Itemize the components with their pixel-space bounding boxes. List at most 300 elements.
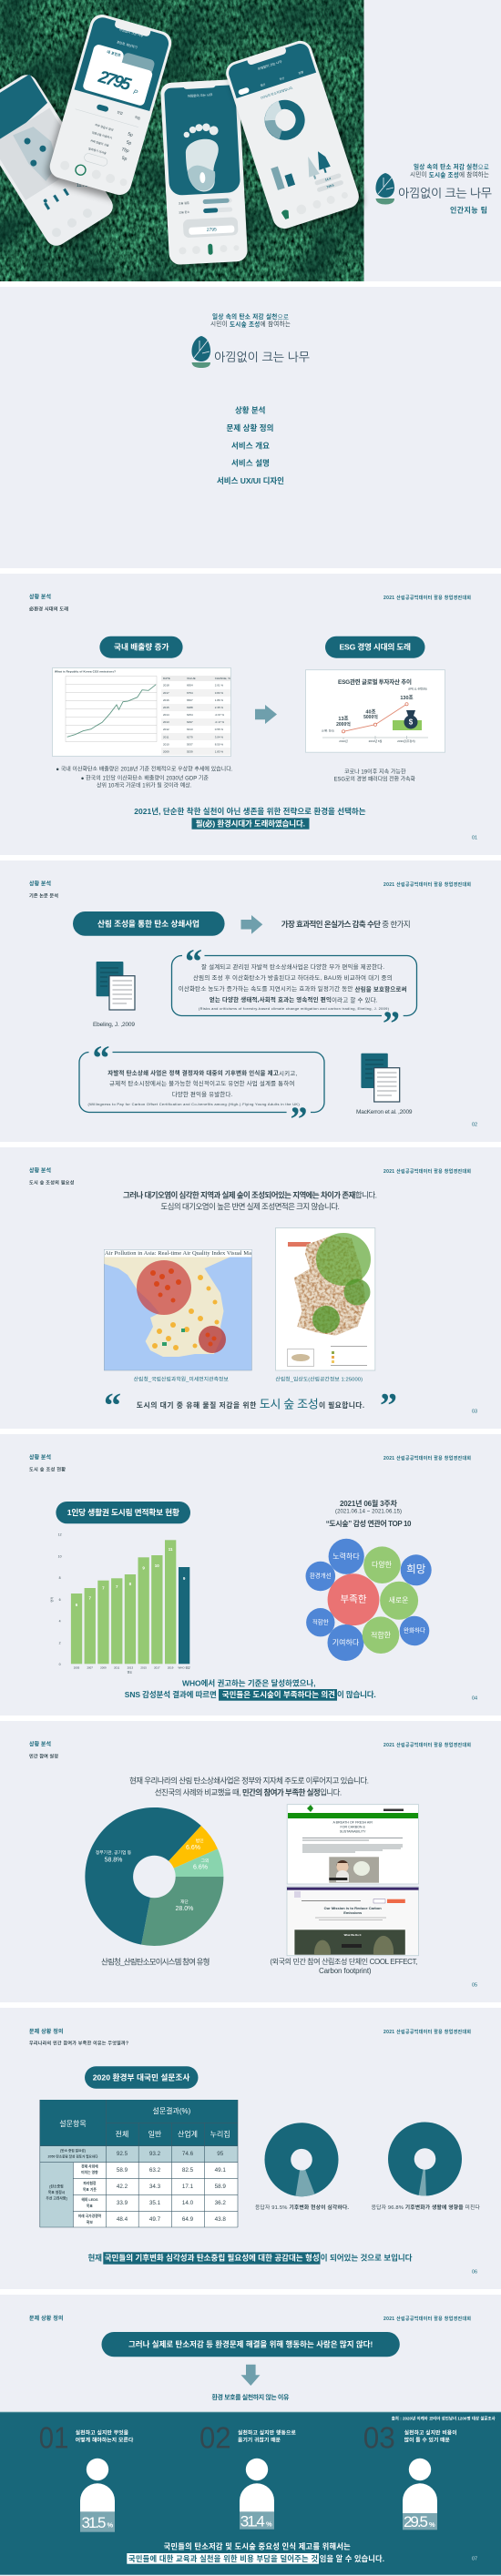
- conclusion: 임을 알 수 있습니다.: [320, 2554, 384, 2563]
- page number: 04: [472, 1695, 477, 1701]
- text: most effective: 가장 효과적인 온실가스 감축 수단 중 한가지: [281, 920, 411, 929]
- pie captions: 응답자 96.8% 기후변화가 생활에 영향을 미친다: [372, 2204, 480, 2211]
- reason 03: 03: [363, 2420, 395, 2455]
- intro text: 도심의 대기오염이 높은 반면 실제 조성면적은 크지 않습니다.: [160, 1202, 340, 1211]
- captions: 산림청_국립산림과학원_미세먼지관측정보: [134, 1376, 229, 1383]
- text: ESG note: [333, 768, 415, 782]
- chart: ESG investment: [306, 670, 445, 752]
- header: 2021 산림공공빅데이터 활용 창업경진대회: [383, 1742, 471, 1748]
- conclusion: 현재: [87, 2254, 102, 2263]
- quote 2: (Willingness to Pay for Carbon Offset Certification and Co-benefits among (High-) Flying Young Adults in the UK): [87, 1102, 300, 1106]
- bar chart: area per person: 2017: [154, 1666, 160, 1670]
- chart: Korea CO2 emissions: 6754: [187, 691, 193, 695]
- donut chart: participation type: 28.0%: [175, 1906, 193, 1912]
- phone: statistics screen: 주간: [279, 76, 285, 81]
- conclusion: [87, 2252, 413, 2265]
- reason 01: 어떻게 해야하는지 모른다: [76, 2437, 134, 2444]
- reason 01: [39, 2420, 134, 2532]
- reason 03: 실천하고 싶지만 비용이: [404, 2429, 457, 2437]
- phone: points screen: 반값: [117, 109, 124, 116]
- table: survey results: 누리집: [210, 2129, 230, 2138]
- phone: points screen: 5p: [127, 132, 134, 138]
- table: survey results: 2050 탄소중립 달성 검토가 필요하다: [48, 2153, 98, 2158]
- table: survey results: 17.1: [182, 2184, 194, 2190]
- chart: ESG investment: 2010년: [339, 738, 348, 743]
- phone: points screen: P: [132, 89, 138, 97]
- tagline: 일상 속의 탄소 저감 실천으로: [414, 162, 489, 171]
- phone: statistics screen: [223, 37, 366, 236]
- callout: urban forest needed: [104, 1387, 397, 1425]
- table: survey results: 산업계: [178, 2129, 198, 2138]
- table: survey results: 93.2: [149, 2151, 161, 2157]
- chart: Korea CO2 emissions: CHANGE, %: [215, 677, 230, 680]
- screenshot: Cool Effect: A BREATH OF FRESH AIR: [332, 1821, 373, 1825]
- reason 02: 31.4: [240, 2513, 265, 2530]
- chart: Korea CO2 emissions: -0.17 %: [215, 720, 224, 724]
- chart: Korea CO2 emissions: 3.04 %: [215, 735, 223, 738]
- reason 02: 02: [199, 2420, 231, 2455]
- intro text: 현재 우리나라의 산림 탄소상쇄사업은 정부와 지자체 주도로 이루어지고 있습니다.: [129, 1777, 369, 1786]
- reason 03: %: [429, 2520, 435, 2529]
- bar chart: area per person: 10: [155, 1563, 159, 1568]
- quote 2: [79, 1039, 324, 1139]
- reason 03: 29.5: [404, 2513, 428, 2530]
- bar chart: area per person: 2005: [74, 1666, 80, 1670]
- table: survey results: 43.8: [215, 2216, 226, 2223]
- conclusion: 국민들에 대한 교육과 실천을 위한 비용 부담을 덜어주는 것: [128, 2554, 318, 2563]
- bar chart: area per person: 10: [58, 1554, 62, 1558]
- screenshot: Cool Effect: [287, 1805, 419, 1884]
- tagline: 시민이 도시숲 조성에 참여하는: [210, 320, 291, 328]
- page number: 07: [472, 2557, 477, 2562]
- donut chart: participation type: 재단: [180, 1899, 189, 1905]
- table: survey results: 82.5: [182, 2167, 194, 2174]
- icon: document: [97, 962, 135, 1010]
- conclusion: 필(必) 환경시대가 도래하였습니다.: [196, 820, 305, 829]
- chart: Korea CO2 emissions: 6313: [187, 728, 193, 731]
- bar chart: area per person: 8: [59, 1576, 61, 1580]
- pill: not many act: 그러나 실제로 탄소저감 등 환경문제 해결을 위해 행동하는 사람은 많지 않다!: [128, 2339, 373, 2348]
- icon: document: [361, 1054, 400, 1102]
- header: [29, 1454, 471, 1472]
- pie captions: [255, 2204, 480, 2211]
- page number: 01: [472, 836, 477, 841]
- table: survey results: 경제 사회에: [81, 2164, 98, 2169]
- page number: 05: [472, 1983, 477, 1989]
- slide: 01 situation analysis: [0, 574, 501, 855]
- chart: ESG investment: 40조: [365, 708, 376, 716]
- header: [29, 1167, 471, 1186]
- table: survey results: [40, 2100, 238, 2227]
- chart: Korea CO2 emissions: DATE: [163, 677, 170, 680]
- chart: Korea CO2 emissions: 2.35 %: [215, 706, 223, 709]
- conclusion: [134, 807, 366, 830]
- table: survey results: 14.0: [182, 2200, 194, 2206]
- bar chart: area per person: 4: [59, 1620, 61, 1624]
- chart: Korea CO2 emissions: 2010: [163, 742, 169, 746]
- callout: urban forest needed: 도시 숲 조성: [260, 1397, 319, 1411]
- chart: ESG investment: (단위: 달러): [322, 729, 334, 733]
- slide: 04 urban forest status: [0, 1434, 501, 1716]
- logo: 아낌없이 크는 나무: [398, 188, 492, 199]
- subheading: 환경 보호를 실천하지 않는 이유: [211, 2393, 290, 2401]
- chart: Korea CO2 emissions: 2016: [163, 698, 169, 702]
- bar chart: area per person: 12: [58, 1533, 62, 1537]
- chart: Korea CO2 emissions: 2017: [163, 691, 169, 695]
- pie chart: climate impact: [388, 2122, 462, 2196]
- donut chart: participation type: [85, 1807, 223, 1946]
- bubble chart: sentiment words: 부족한: [341, 1593, 367, 1604]
- chart: Korea CO2 emissions: 6279: [187, 735, 193, 738]
- table: survey results: 42.2: [117, 2184, 128, 2190]
- screenshot: Carbon Footprint: [287, 1887, 419, 1956]
- conclusion: 이 많습니다.: [337, 1690, 376, 1699]
- header: 기존 논문 분석: [29, 891, 58, 899]
- conclusion: 이 되어있는 것으로 보입니다: [321, 2254, 413, 2263]
- arrow: [240, 915, 262, 934]
- reason 02: %: [266, 2520, 272, 2528]
- header: 必환경 시대의 도래: [29, 605, 68, 612]
- chart: ESG investment: $: [409, 718, 414, 727]
- chart: ESG investment: 130조: [400, 695, 414, 701]
- chart: ESG investment: (단위: 조, 천억달러): [408, 687, 427, 690]
- table: survey results: 일반: [148, 2131, 162, 2138]
- intro text: [123, 1190, 377, 1211]
- header: 우리나라의 민간 참여가 부족한 이유는 무엇일까?: [29, 2041, 128, 2047]
- chart: Korea CO2 emissions: 2015: [163, 706, 169, 709]
- table of contents: 서비스 UX/UI 디자인: [217, 476, 284, 485]
- caption: screenshots: Carbon footprint): [319, 1967, 372, 1975]
- bubble chart: sentiment words: 노력하다: [332, 1552, 360, 1561]
- table: survey results: 해외 LEDS: [81, 2197, 98, 2202]
- chart: Korea CO2 emissions: 8.50 %: [215, 742, 223, 746]
- heading: sentiment: (2021.06.14 ~ 2021.06.15): [335, 1510, 402, 1515]
- chart: ESG investment: 2019년 6월: [369, 738, 383, 743]
- pill: carbon offset: [73, 911, 225, 936]
- phone: points screen: 카페 텀블러 사용: [90, 138, 110, 148]
- bar chart: area per person: 2019: [168, 1666, 174, 1670]
- bar chart: area per person: 9: [183, 1576, 186, 1581]
- slide: cover: [0, 0, 501, 281]
- phone: statistics screen: 월별: [298, 69, 304, 76]
- phone: points screen: [44, 11, 174, 203]
- tagline: [410, 162, 489, 178]
- bar chart: area per person: 2013: [128, 1666, 134, 1670]
- pill: domestic emissions: [99, 636, 183, 658]
- captions: 산림청_임상도(산림공간정보 1:25000): [275, 1376, 363, 1383]
- panel: reasons: [0, 2411, 501, 2575]
- quote 1: 얻는 다양한 생태적,사회적 효과는 영속적인 편익이라고 할 수 있다.: [210, 995, 378, 1003]
- header: 2021 산림공공빅데이터 활용 창업경진대회: [383, 881, 471, 888]
- bubble chart: sentiment words: 적합한: [312, 1617, 329, 1626]
- pill: survey: [85, 2066, 199, 2089]
- header: 상황 분석: [29, 1741, 51, 1748]
- table of contents: 서비스 설명: [231, 459, 270, 468]
- conclusion: [127, 2542, 384, 2564]
- arrow: down: [240, 2365, 261, 2386]
- bar chart: area per person: 6: [59, 1598, 61, 1602]
- chart: ESG investment: 13조: [338, 716, 349, 722]
- table: survey results: 파리협정: [83, 2181, 97, 2185]
- screenshot: Cool Effect: FOR CARBON &: [341, 1826, 365, 1829]
- pie chart: climate seriousness: [264, 2123, 339, 2196]
- bubble chart: sentiment words: [306, 1539, 432, 1661]
- conclusion: 국민들의 탄소저감 및 도시숲 중요성 인식 제고를 위해서는: [164, 2542, 351, 2551]
- bubble chart: sentiment words: 완화하다: [404, 1626, 425, 1634]
- chart: Korea CO2 emissions: 2011: [163, 735, 169, 738]
- phone: footprint screen: 오늘 걸음: [179, 200, 189, 206]
- header: 문제 상황 정의: [29, 2028, 63, 2035]
- bubble chart: sentiment words: 다양한: [372, 1561, 393, 1569]
- team name: 인간지능 팀: [450, 206, 487, 215]
- table: survey results: 49.1: [215, 2167, 226, 2174]
- text: emissions bullets: ● 한국의 1인당 이산화탄소 배출량이 2030년 GDP 기준: [81, 775, 209, 782]
- bubble chart: sentiment words: 희망: [406, 1563, 426, 1575]
- conclusion: [125, 1678, 376, 1701]
- chart: Korea CO2 emissions: 5937: [187, 742, 193, 746]
- header: 도시 숲 조성의 필요성: [29, 1178, 75, 1186]
- chart: Korea CO2 emissions: 6507: [187, 698, 193, 702]
- bar chart: area per person: 11: [169, 1547, 173, 1552]
- chart: Korea CO2 emissions: 6297: [187, 720, 193, 724]
- bar chart: area per person: 2007: [87, 1666, 93, 1670]
- source: MacKerron: MacKerron et al. ,2009: [356, 1109, 413, 1115]
- reason 01: 실천하고 싶지만 무엇을: [76, 2429, 129, 2437]
- chart: Korea CO2 emissions: 3.83 %: [215, 691, 223, 695]
- phone: points screen: 아낌없이 크는 나무: [118, 26, 145, 38]
- header: 2021 산림공공빅데이터 활용 창업경진대회: [383, 1168, 471, 1175]
- quote 1: ”: [383, 1005, 400, 1044]
- chart: Korea CO2 emissions: 2009: [163, 749, 169, 753]
- donut chart: participation type: 법인: [196, 1838, 204, 1844]
- table of contents: 상황 분석: [235, 406, 266, 415]
- callout: urban forest needed: 도시의 대기 중 유해 물질 저감을 위한: [137, 1400, 256, 1410]
- table of contents: 문제 상황 정의: [226, 423, 273, 433]
- chart: Korea CO2 emissions: 2012: [163, 728, 169, 731]
- table: survey results: 확보: [87, 2220, 93, 2225]
- intro text: 선진국의 사례와 비교했을 때, 민간의 참여가 부족한 실정입니다.: [155, 1787, 342, 1797]
- bar chart: area per person: 2009: [100, 1666, 107, 1670]
- header: [29, 594, 471, 612]
- phone: statistics screen: OO님의 탄소저감량입니다.: [260, 85, 293, 100]
- table: survey results: 설문결과(%): [152, 2106, 191, 2115]
- chart: Korea CO2 emissions: 2.01 %: [215, 684, 223, 687]
- table: survey results: 49.7: [149, 2216, 161, 2223]
- table: survey results: 92.5: [117, 2151, 128, 2157]
- donut chart: participation type: 그외: [201, 1858, 209, 1864]
- caption: donut: 산림청_산림탄소모이시스템 참여 유형: [101, 1957, 210, 1966]
- chart: Korea CO2 emissions: 2014: [163, 713, 169, 717]
- callout: urban forest needed: ”: [380, 1387, 397, 1425]
- caption: screenshots: (외국의 민간 참여 산림조성 단체인 COOL EFFECT,: [270, 1957, 417, 1966]
- bar chart: area per person: 9: [142, 1566, 145, 1570]
- bar chart: area per person: 연도: [128, 1670, 132, 1675]
- header: [29, 881, 471, 899]
- quote 2: ”: [290, 1101, 308, 1139]
- quote 1: 잘 설계되고 관리된 자발적 탄소상쇄사업은 다양한 부가 편익을 제공한다.: [201, 962, 384, 971]
- screenshot: Carbon Footprint: What We Do It: [344, 1933, 361, 1937]
- header: 2021 산림공공빅데이터 활용 창업경진대회: [383, 2029, 471, 2035]
- table of contents: [217, 406, 284, 485]
- logo: [375, 173, 492, 204]
- map: air pollution: [104, 1249, 251, 1370]
- phone: statistics screen: 749.5: [326, 183, 334, 189]
- tagline: 일상 속의 탄소 저감 실천으로: [212, 312, 289, 321]
- logo: [191, 336, 310, 368]
- pill: domestic emissions: 국내 배출량 증가: [114, 642, 169, 652]
- chart: Korea CO2 emissions: 6388: [187, 706, 193, 709]
- bar chart: area per person: 7: [88, 1595, 91, 1601]
- header: 도시 숲 조성 현황: [29, 1465, 66, 1472]
- page number: 02: [472, 1123, 477, 1128]
- chart: Korea CO2 emissions: 2018: [163, 684, 169, 687]
- text: emissions bullets: 상위 10개국 가운데 1위가 될 것이라 예상.: [97, 782, 192, 789]
- reason 01: 31.5: [82, 2514, 106, 2531]
- chart: Korea CO2 emissions: 5539: [187, 749, 193, 753]
- phone: points screen: 포인트 계산하기: [116, 39, 138, 50]
- chart: ESG investment: 2030년(추정치): [397, 738, 415, 743]
- chart: Korea CO2 emissions: [53, 668, 231, 756]
- chart: ESG investment: 5000억: [363, 714, 378, 720]
- table: survey results: 36.2: [215, 2200, 226, 2206]
- table: survey results: 48.4: [117, 2216, 128, 2223]
- text: ESG note: 코로나 19이후 지속 가능한: [344, 768, 406, 775]
- phone: points screen: 하루 걸음수 달성: [95, 122, 114, 132]
- slide: 06 survey: [0, 2008, 501, 2289]
- table: survey results: 목표: [87, 2204, 93, 2208]
- slide: 07 reasons for inaction: [0, 2295, 501, 2576]
- caption: screenshots: [270, 1957, 417, 1975]
- header: 2021 산림공공빅데이터 활용 창업경진대회: [383, 595, 471, 601]
- bar chart: area per person: 2015: [140, 1666, 147, 1670]
- phone: footprint screen: 아낌없이 크는 나무: [188, 92, 213, 98]
- bar chart: area per person: WHO 권장: [179, 1665, 190, 1670]
- text: emissions bullets: ● 국내 이산화탄소 배출량은 2018년 기준 전체적으로 우상향 추세에 있습니다.: [56, 766, 233, 773]
- bubble chart: sentiment words: 환경개선: [310, 1572, 332, 1579]
- header: [29, 1741, 471, 1759]
- bar chart: area per person: 2: [59, 1641, 61, 1644]
- table: survey results: 전체: [116, 2129, 128, 2138]
- bar chart: area per person: 7: [102, 1586, 105, 1590]
- phone: footprint screen: 2795: [207, 227, 217, 233]
- header: [29, 2028, 471, 2047]
- chart: ESG investment: ESG관련 글로벌 투자자산 추이: [338, 677, 412, 686]
- table: survey results: 64.9: [182, 2216, 194, 2223]
- donut chart: participation type: 정부기관, 공기업 등: [96, 1849, 132, 1856]
- chart: Korea CO2 emissions: 1.86 %: [215, 698, 223, 702]
- table: survey results: 35.1: [149, 2200, 161, 2206]
- header: 민간 참여 실정: [29, 1752, 58, 1759]
- table: survey results: 설문항목: [59, 2119, 87, 2128]
- header: 2021 산림공공빅데이터 활용 창업경진대회: [383, 1455, 471, 1461]
- conclusion: WHO에서 권고하는 기준은 달성하였으나,: [182, 1678, 315, 1687]
- callout: urban forest needed: 이 필요합니다.: [319, 1400, 364, 1410]
- donut chart: participation type: 58.8%: [105, 1858, 122, 1863]
- chart: Korea CO2 emissions: 2013: [163, 720, 169, 724]
- intro text: [129, 1777, 369, 1797]
- table: survey results: 미래 국가경쟁력: [78, 2214, 102, 2218]
- phone: statistics screen: 일간: [260, 82, 266, 87]
- bar chart: area per person: [49, 1533, 190, 1675]
- tagline: [210, 312, 291, 328]
- chart: Korea CO2 emissions: 0.55 %: [215, 728, 223, 731]
- table: survey results: 목표 기준: [83, 2187, 97, 2192]
- screenshot: Carbon Footprint: Emissions: [343, 1910, 363, 1915]
- table: survey results: 58.9: [215, 2184, 226, 2190]
- quote 2: 자발적 탄소상쇄 사업은 정책 결정자와 대중의 기후변화 인식을 제고시키고,: [107, 1069, 297, 1076]
- table: survey results: 63.2: [149, 2167, 161, 2174]
- photo: grass background: [0, 0, 364, 281]
- chart: Korea CO2 emissions: 6254: [187, 713, 193, 717]
- chart: Korea CO2 emissions: What is Republic of Korea CO2 emissions?: [55, 669, 116, 673]
- table: survey results: 33.9: [117, 2200, 128, 2206]
- screenshot: Carbon Footprint: Our Mission is to Reduce Carbon: [324, 1906, 382, 1910]
- quote 1: (Risks and criticisms of forestry-based climate change mitigation and carbon trading, Ebeling, J. 2009): [199, 1006, 390, 1011]
- reason 02: [199, 2420, 296, 2530]
- map: air pollution: Air Pollution in Asia: Real-time Air Quality Index Visual Ma: [105, 1250, 251, 1257]
- table: survey results: 95: [217, 2151, 224, 2157]
- captions: [134, 1376, 363, 1383]
- source: 출처 : 2020년 이케아 코리아 성인남녀 1200명 대상 설문조사: [392, 2415, 496, 2422]
- slide: 02 prior research: [0, 860, 501, 1142]
- phone: footprint screen: 오늘 탄소: [179, 209, 190, 215]
- bar chart: area per person: 면적: [49, 1597, 54, 1602]
- bubble chart: sentiment words: 적합한: [371, 1630, 392, 1639]
- header: 상황 분석: [29, 594, 51, 601]
- reason 01: %: [107, 2520, 113, 2530]
- pie captions: 응답자 91.5% 기후변화 현상이 심각하다.: [255, 2204, 349, 2211]
- conclusion: SNS 감성분석 결과에 따르면: [125, 1690, 217, 1699]
- donut chart: participation type: 6.6%: [186, 1845, 200, 1851]
- table: survey results: 목표 설정시: [48, 2190, 66, 2194]
- pill: ESG management: [325, 636, 424, 658]
- donut chart: participation type: 6.6%: [193, 1865, 208, 1870]
- phone: points screen: 대중교통 이용하기: [91, 130, 113, 140]
- table: survey results: 58.9: [117, 2167, 128, 2174]
- table: survey results: [탄소 중립 필요성]: [60, 2148, 86, 2153]
- bar chart: area per person: 8: [129, 1582, 132, 1586]
- slide: contents: [0, 287, 501, 568]
- header: 상황 분석: [29, 881, 51, 888]
- pill: ESG management: ESG 경영 시대의 도래: [339, 642, 411, 652]
- table of contents: 서비스 개요: [231, 441, 270, 450]
- quote 1: 산림의 조성 후 이산화탄소가 방출된다고 하더라도, BAU와 비교하여 대기 중의: [193, 973, 393, 982]
- chart: Korea CO2 emissions: VALUE: [187, 677, 196, 680]
- bar chart: area per person: 0: [59, 1663, 61, 1666]
- logo: 아낌없이 크는 나무: [214, 351, 310, 362]
- reason 01: 01: [39, 2420, 68, 2455]
- table: survey results: 34.3: [149, 2184, 161, 2190]
- reason 02: 옮기기 귀찮기 때문: [238, 2437, 281, 2444]
- conclusion: 2021년, 단순한 착한 실천이 아닌 생존을 위한 전략으로 환경을 선택하는: [134, 807, 366, 816]
- phone: points screen: 5p: [121, 156, 128, 162]
- tagline: 시민이 도시숲 조성에 참여하는: [410, 170, 489, 178]
- slide: 03 need for urban forests: [0, 1147, 501, 1429]
- pill: chart title: [56, 1502, 190, 1523]
- bubble chart: sentiment words: 새로운: [388, 1596, 409, 1604]
- bar chart: area per person: 2011: [114, 1666, 120, 1670]
- header: 상황 분석: [29, 1454, 51, 1461]
- phone: map screen: [0, 69, 122, 254]
- header: 문제 상황 정의: [29, 2315, 63, 2322]
- table: survey results: 74.6: [182, 2151, 194, 2157]
- text: ESG note: ESG로의 경영 패러다임 전환 가속화: [333, 775, 415, 782]
- pill: survey: 2020 환경부 대국민 설문조사: [93, 2072, 189, 2082]
- pill: not many act: [102, 2332, 400, 2357]
- header: [29, 2315, 471, 2322]
- quote 2: 규제적 탄소시장에서는 불가능한 혁신적이고도 유연한 사업 설계를 통하여: [109, 1079, 294, 1087]
- phone: footprint screen: [160, 79, 250, 270]
